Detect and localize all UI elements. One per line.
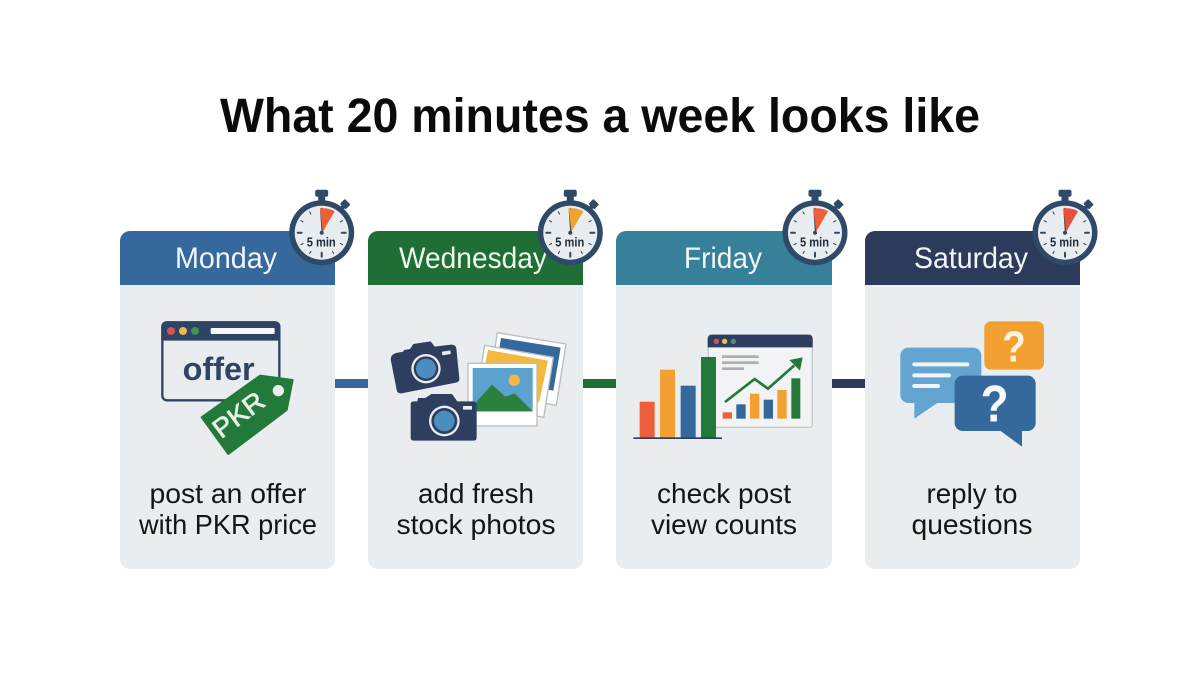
day label: Monday <box>175 242 277 275</box>
day label: Friday <box>684 242 762 275</box>
task text: view counts <box>651 509 797 540</box>
icon: chat bubbles with question marks: ? <box>981 375 1009 433</box>
card body <box>865 285 1080 569</box>
icon: browser offer with PKR tag: offer <box>183 351 255 387</box>
icon: stopwatch 5 min: 5 min <box>1050 235 1079 250</box>
connector: Friday to Saturday <box>832 379 865 388</box>
icon: stopwatch 5 min: 5 min <box>555 235 584 250</box>
card body <box>120 285 335 569</box>
title: What 20 minutes a week looks like <box>220 90 980 143</box>
task text: with PKR price <box>138 509 317 540</box>
icon: chat bubbles with question marks <box>900 321 1044 447</box>
connector: Wednesday to Friday <box>583 379 616 388</box>
task text <box>912 478 1032 540</box>
card header <box>368 231 583 285</box>
icon: stopwatch 5 min <box>1032 190 1098 265</box>
icon: chat bubbles with question marks: ? <box>1002 324 1026 372</box>
card body <box>368 285 583 569</box>
task text <box>651 478 797 540</box>
task text: stock photos <box>396 509 556 540</box>
icon: browser offer with PKR tag <box>161 321 293 454</box>
icon: stopwatch 5 min <box>289 190 354 265</box>
card body <box>616 285 832 569</box>
icon: bar charts and dashboard <box>633 335 813 439</box>
task text: reply to <box>926 478 1018 509</box>
panel: Saturday <box>865 190 1098 569</box>
connector: Monday to Wednesday <box>335 379 368 388</box>
panel: Monday <box>120 190 354 569</box>
icon: stopwatch 5 min <box>782 190 848 265</box>
panel: Friday <box>616 190 848 569</box>
card header <box>865 231 1080 285</box>
day label: Saturday <box>914 242 1028 275</box>
task text: questions <box>912 509 1032 540</box>
task text <box>138 478 317 540</box>
icon: stopwatch 5 min <box>538 190 603 265</box>
task text: add fresh <box>418 478 534 509</box>
icon: stopwatch 5 min: 5 min <box>800 235 829 250</box>
card header <box>616 231 832 285</box>
task text: post an offer <box>150 478 306 509</box>
panel: Wednesday <box>368 190 603 569</box>
task text <box>396 478 556 540</box>
icon: browser offer with PKR tag: PKR <box>207 386 271 444</box>
day label: Wednesday <box>399 242 547 275</box>
card header <box>120 231 335 285</box>
icon: stopwatch 5 min: 5 min <box>307 235 336 250</box>
icon: cameras and photos <box>391 333 566 441</box>
task text: check post <box>657 478 791 509</box>
